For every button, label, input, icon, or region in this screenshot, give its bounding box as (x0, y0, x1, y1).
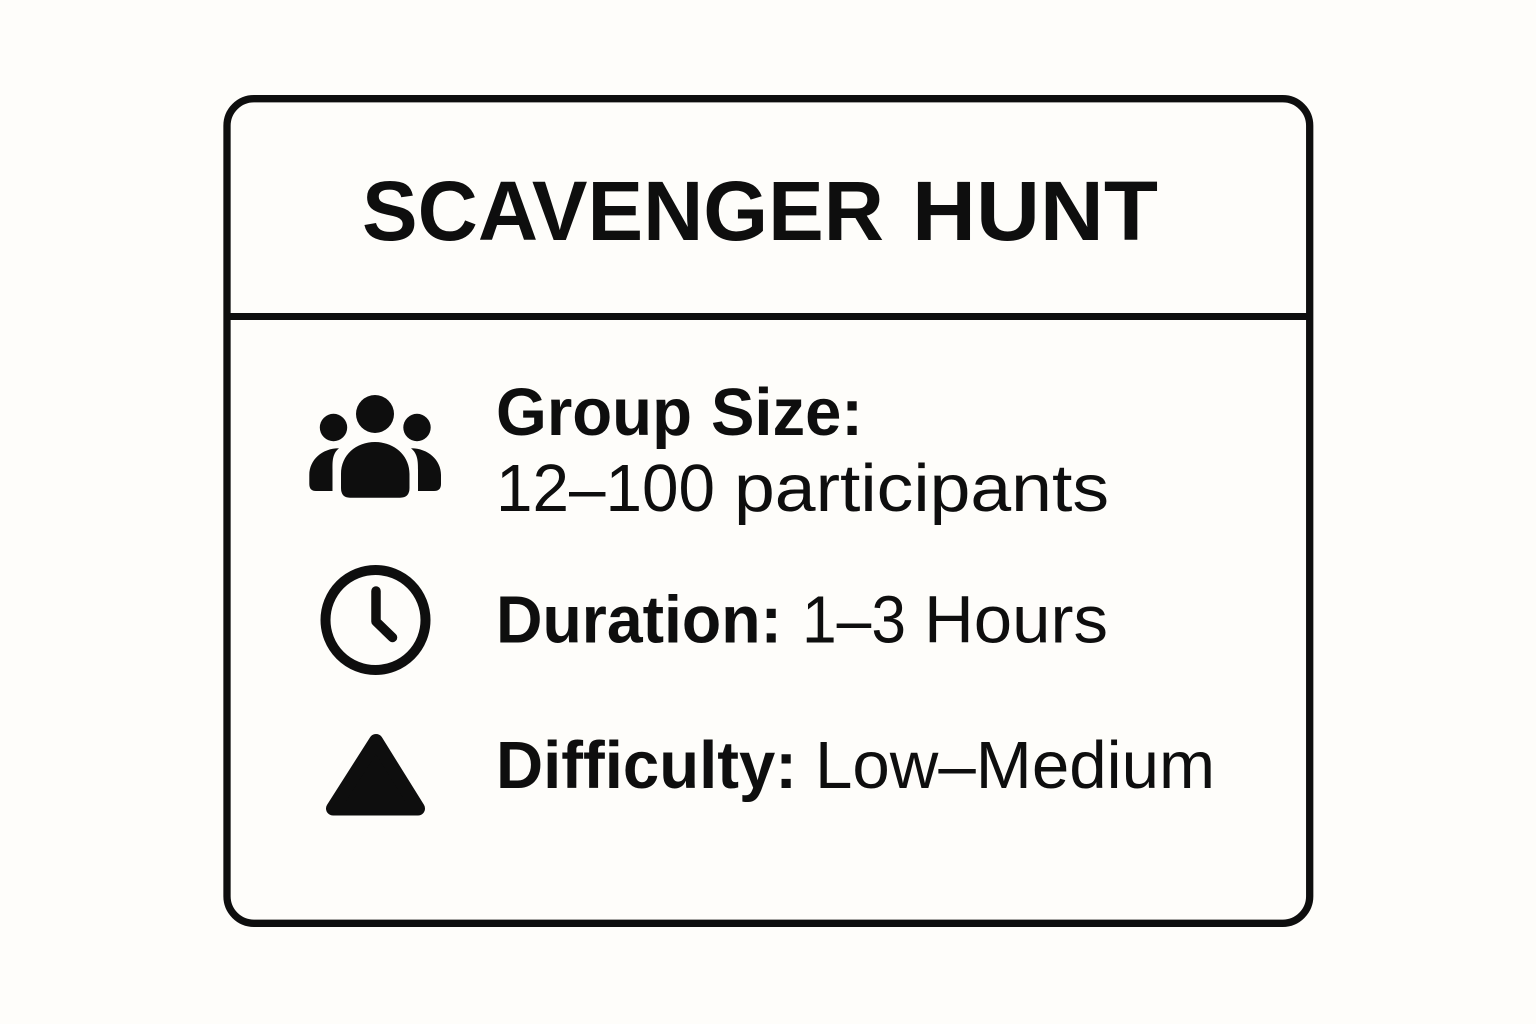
title: HUNT (912, 164, 1158, 258)
text: group size (496, 375, 1109, 526)
text: group size: 12–100 (496, 451, 715, 526)
icon: group of people (309, 395, 441, 498)
text: duration: Hours (924, 582, 1108, 658)
header divider (227, 313, 1309, 320)
title (362, 164, 1158, 258)
text: duration: Duration: (496, 582, 782, 658)
text: group size: participants (734, 451, 1109, 526)
text: difficulty: Difficulty: (496, 728, 797, 803)
text: difficulty: Low–Medium (815, 728, 1215, 803)
title: SCAVENGER (362, 164, 884, 258)
icon: clock (326, 570, 426, 670)
text: group size: Size: (711, 375, 863, 450)
icon: triangle (333, 741, 418, 808)
text: group size: Group (496, 375, 692, 450)
text: duration (496, 582, 1108, 658)
panel: card outline (227, 99, 1310, 923)
text: duration: 1–3 (802, 582, 906, 658)
text: difficulty (496, 728, 1215, 803)
